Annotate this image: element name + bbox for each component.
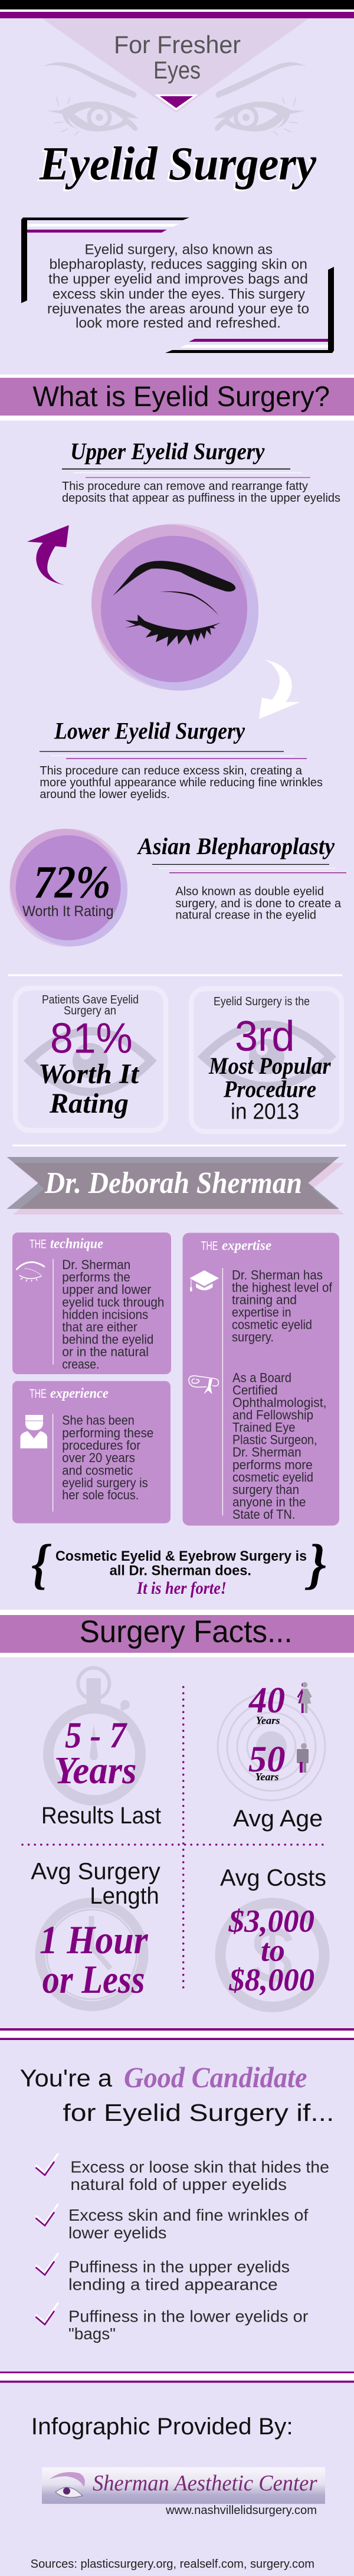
fact: results last — [41, 1668, 161, 1829]
text block two: As a Board — [232, 1371, 291, 1385]
panel: 3rd most popular procedure: Eyelid Surgery is the — [214, 995, 310, 1008]
text: lower eyelid description: This procedure can reduce excess skin, creating a — [40, 764, 303, 777]
icon: man — [297, 1743, 309, 1773]
text block one: training and — [232, 1293, 297, 1307]
text block: that are either — [62, 1319, 137, 1334]
eyebrow and closed lid — [113, 561, 235, 647]
fact: results last: Results Last — [41, 1803, 161, 1829]
header triangle — [42, 18, 309, 113]
item four — [35, 2303, 308, 2343]
text: asian blepharoplasty description — [175, 885, 342, 922]
fact: average age: Years — [256, 1714, 280, 1726]
icon: eye watermark — [204, 1025, 330, 1086]
fact: average costs — [220, 1865, 326, 2007]
label: the experience: THE — [30, 1387, 47, 1401]
text block: performs the — [62, 1270, 130, 1284]
text: upper eyelid description: This procedure can remove and rearrange fatty — [62, 480, 308, 493]
item four: "bags" — [68, 2325, 116, 2343]
callout: her forte: { — [31, 1534, 52, 1595]
left eye — [43, 62, 139, 136]
text block: Dr. Sherman — [62, 1257, 130, 1272]
icon: clock — [40, 1903, 143, 2006]
stat circle: 72% worth it rating — [9, 829, 127, 947]
intro paragraph — [47, 242, 309, 331]
intro paragraph: the upper eyelid and improves bags and — [48, 272, 308, 287]
text block two — [232, 1371, 327, 1522]
item one — [35, 2153, 329, 2193]
label: the technique: THE — [30, 1238, 47, 1251]
intro paragraph: Eyelid surgery, also known as — [85, 242, 273, 257]
text block two: cosmetic eyelid — [232, 1470, 313, 1485]
banner: Dr. Deborah Sherman ribbon: Dr. Deborah Sherman — [44, 1166, 302, 1200]
intro paragraph: rejuvenates the areas around your eye to — [47, 301, 309, 317]
item one: Excess or loose skin that hides the — [70, 2157, 329, 2176]
text block: crease. — [62, 1356, 99, 1372]
tagline: For Fresher Eyes: For Fresher — [114, 31, 241, 58]
fact: results last: Years — [54, 1749, 137, 1792]
tagline: For Fresher Eyes — [114, 31, 241, 84]
text block two: surgery than — [232, 1482, 299, 1497]
icon: purple curved arrow — [27, 525, 69, 585]
icon: eye circle — [91, 524, 258, 691]
item three — [35, 2253, 290, 2294]
text block: or in the natural — [62, 1345, 149, 1359]
panel: 81% worth it rating: Rating — [49, 1088, 129, 1119]
heading: infographic provided by: Infographic Provided By: — [31, 2414, 293, 2440]
text: lower eyelid description: more youthful appearance while reducing fine wrinkles — [40, 776, 323, 789]
panel: 3rd most popular procedure: 3rd — [235, 1013, 294, 1060]
panel: 81% worth it rating: Patients Gave Eyelid — [42, 993, 139, 1006]
top header bars — [0, 0, 354, 18]
icon: target rings — [218, 1693, 325, 1800]
text block two: Trained Eye — [232, 1420, 295, 1435]
section banner: Surgery Facts — [0, 1610, 354, 1658]
label: the expertise: THE — [201, 1240, 218, 1253]
logo: Sherman Aesthetic Center — [42, 2467, 325, 2504]
fact: average costs: to — [261, 1933, 285, 1968]
dotted grid dividers — [22, 1687, 327, 1990]
text: asian blepharoplasty description: Also known as double eyelid — [175, 885, 324, 898]
icon: graduation cap — [189, 1270, 219, 1292]
text block one: surgery. — [232, 1330, 274, 1345]
label: the expertise — [201, 1238, 271, 1254]
banner: Dr. Deborah Sherman ribbon — [7, 1157, 345, 1215]
text block two: anyone in the — [232, 1495, 306, 1509]
fact: average age — [218, 1681, 325, 1832]
icon: woman — [297, 1682, 312, 1713]
background eyes illustration — [43, 62, 307, 136]
callout: her forte: all Dr. Sherman does. — [110, 1563, 251, 1579]
panel: 3rd most popular procedure: Procedure — [223, 1075, 316, 1103]
text block two: Plastic Surgeon, — [232, 1433, 317, 1447]
panel: 3rd most popular procedure: in 2013 — [231, 1100, 299, 1124]
text: asian blepharoplasty description: surgery, and is done to create a — [175, 897, 342, 910]
item two: lower eyelids — [68, 2224, 166, 2242]
stat circle: 72% worth it rating: 72% — [34, 857, 111, 908]
right eye — [214, 62, 307, 136]
text block two: Ophthalmologist, — [232, 1395, 327, 1410]
logo eye — [50, 2472, 85, 2497]
text block: over 20 years — [62, 1450, 135, 1465]
intro paragraph: excess skin under the eyes. This surgery — [53, 286, 305, 302]
text: upper eyelid description — [62, 480, 340, 505]
text block: She has been — [62, 1413, 135, 1427]
heading: good candidate — [20, 2061, 334, 2126]
label: the experience — [30, 1386, 109, 1401]
intro paragraph: blepharoplasty, reduces sagging skin on — [50, 256, 307, 273]
icon: diploma — [189, 1376, 218, 1394]
text block one: Dr. Sherman has — [232, 1267, 323, 1282]
text block: performing these — [62, 1426, 153, 1440]
fact: average costs: $3,000 — [228, 1903, 314, 1938]
text block: hidden incisions — [62, 1307, 148, 1322]
intro bracket frame — [21, 217, 334, 353]
panel: the experience — [12, 1381, 171, 1524]
intro paragraph: look more rested and refreshed. — [76, 315, 281, 331]
panel: 3rd most popular procedure: Most Popular — [208, 1052, 331, 1079]
text block: eyelid tuck through — [62, 1294, 164, 1309]
text block: procedures for — [62, 1438, 140, 1453]
text block: her sole focus. — [62, 1488, 139, 1502]
fact: average surgery length: or Less — [42, 1957, 145, 2002]
text: lower eyelid description: around the lower eyelids. — [40, 788, 170, 801]
panel: 81% worth it rating — [15, 988, 166, 1130]
icon: eye watermark — [30, 1031, 151, 1092]
label: the expertise: expertise — [222, 1238, 271, 1254]
fact: average surgery length: Length — [90, 1883, 159, 1909]
text: website url: www.nashvillelidsurgery.com — [165, 2504, 317, 2517]
heading: Lower Eyelid Surgery: Lower Eyelid Surgery — [54, 718, 245, 744]
text: lower eyelid description — [40, 764, 323, 801]
text block — [62, 1257, 164, 1372]
panel: 81% worth it rating: Worth It — [38, 1058, 140, 1090]
text block two: performs more — [232, 1457, 313, 1472]
icon: stopwatch — [48, 1668, 140, 1800]
panel: the expertise — [183, 1233, 339, 1525]
text block two: State of TN. — [232, 1507, 295, 1522]
item two: Excess skin and fine wrinkles of — [68, 2206, 309, 2224]
text: asian blepharoplasty description: natural crease in the eyelid — [175, 909, 316, 922]
icon: white curved arrow — [259, 659, 300, 719]
item two — [35, 2204, 309, 2242]
callout: her forte: Cosmetic Eyelid & Eyebrow Surgery is — [55, 1548, 307, 1564]
text block one: expertise in — [232, 1305, 291, 1320]
icon: doctor — [20, 1415, 47, 1449]
text: sources: Sources: plasticsurgery.org, realself.com, surgery.com — [31, 2558, 314, 2571]
text block one — [232, 1267, 333, 1345]
icon: dollar coin — [221, 1903, 324, 2007]
logo: Sherman Aesthetic Center: Sherman Aesthetic Center — [93, 2471, 317, 2496]
icon: eye — [17, 1262, 45, 1282]
panel: 81% worth it rating: 81% — [50, 1015, 133, 1063]
panel: 3rd most popular procedure — [191, 989, 342, 1132]
text block two: Certified — [232, 1382, 277, 1398]
section banner: What is Eyelid Surgery?: What is Eyelid Surgery? — [33, 381, 330, 413]
item one: natural fold of upper eyelids — [70, 2175, 287, 2193]
fact: average age: 40 — [248, 1681, 285, 1721]
fact: average costs: Avg Costs — [220, 1865, 326, 1891]
checklist — [35, 2153, 329, 2343]
text block two: and Fellowship — [232, 1408, 313, 1423]
callout: her forte: } — [304, 1534, 326, 1595]
fact: average age: Years — [255, 1771, 278, 1783]
text block: eyelid surgery is — [62, 1475, 148, 1490]
label: the technique: technique — [50, 1237, 103, 1252]
heading: good candidate: You're a — [20, 2065, 112, 2092]
fact: average costs: $8,000 — [228, 1962, 314, 1998]
fact: average age: 50 — [248, 1740, 286, 1780]
text block: upper and lower — [62, 1282, 151, 1297]
heading: Upper Eyelid Surgery: Upper Eyelid Surgery — [70, 438, 265, 465]
panel: 81% worth it rating: Surgery an — [64, 1005, 116, 1018]
heading: good candidate: for Eyelid Surgery if... — [63, 2099, 334, 2126]
fact: average surgery length: Avg Surgery — [31, 1859, 160, 1885]
stat circle: 72% worth it rating: Worth It Rating — [22, 903, 113, 920]
text block one: the highest level of — [232, 1280, 333, 1294]
item four: Puffiness in the lower eyelids or — [68, 2307, 308, 2325]
callout: her forte: It is her forte! — [136, 1578, 227, 1598]
callout: her forte — [31, 1534, 326, 1598]
small triangle marker — [155, 94, 198, 111]
text block: behind the eyelid — [62, 1332, 153, 1346]
text block — [62, 1413, 153, 1502]
tagline: For Fresher Eyes: Eyes — [153, 56, 201, 84]
panel: the technique — [12, 1233, 171, 1374]
fact: average surgery length: 1 Hour — [40, 1917, 148, 1962]
item three: lending a tired appearance — [68, 2276, 278, 2294]
text block two: Dr. Sherman — [232, 1445, 301, 1460]
item three: Puffiness in the upper eyelids — [68, 2257, 290, 2276]
main title: Eyelid Surgery — [37, 140, 314, 192]
section banner: Surgery Facts: Surgery Facts... — [80, 1614, 293, 1649]
main title: Eyelid Surgery — [39, 138, 316, 190]
text block: and cosmetic — [62, 1463, 133, 1477]
fact: average age: Avg Age — [233, 1806, 323, 1832]
label: the technique — [30, 1237, 103, 1252]
label: the experience: experience — [50, 1386, 109, 1401]
text block one: cosmetic eyelid — [232, 1318, 312, 1332]
fact: results last: 5 - 7 — [65, 1716, 128, 1756]
heading: Asian Blepharoplasty: Asian Blepharoplasty — [136, 833, 335, 859]
text: upper eyelid description: deposits that appear as puffiness in the upper eyelids — [62, 492, 340, 505]
section banner: What is Eyelid Surgery? — [0, 374, 354, 420]
heading: good candidate: Good Candidate — [124, 2061, 307, 2094]
fact: average surgery length — [31, 1859, 160, 2006]
